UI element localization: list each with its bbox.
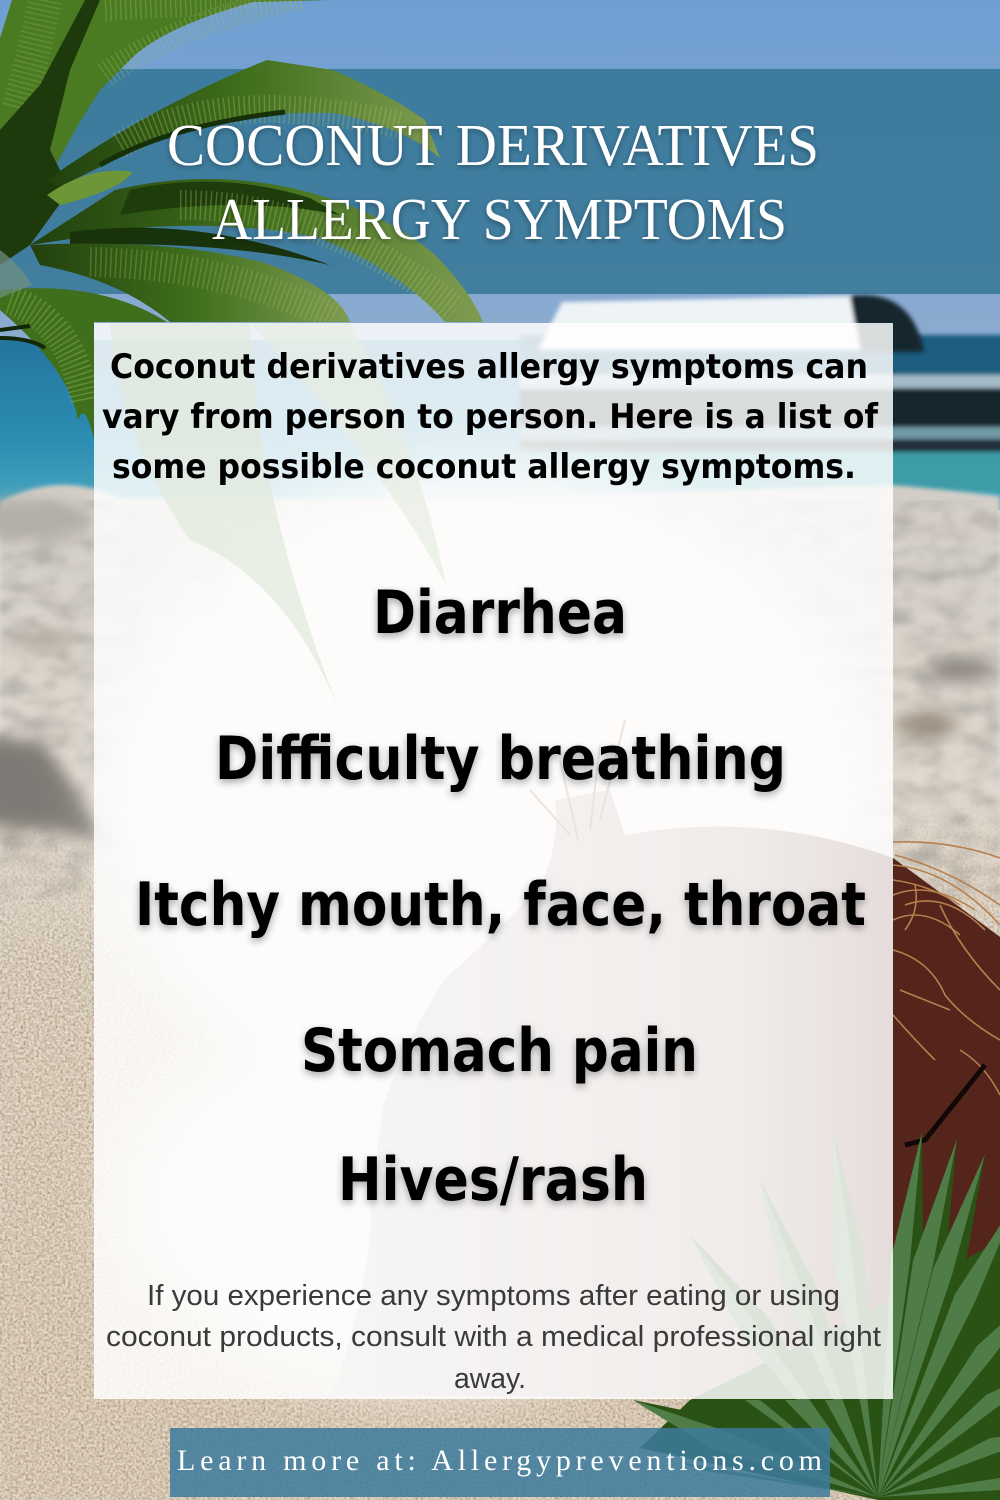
sky xyxy=(0,0,1000,345)
advice text: coconut products, consult with a medical professional right xyxy=(106,1321,881,1353)
symptoms list: Stomach pain xyxy=(301,1016,698,1086)
symptoms list: Difficulty breathing xyxy=(215,724,786,794)
low left frond xyxy=(0,288,167,440)
title line 2: ALLERGY SYMPTOMS xyxy=(212,186,787,252)
sand mounds xyxy=(0,470,994,1390)
pale palm fronds behind the panel xyxy=(110,323,446,725)
title line 1: COCONUT DERIVATIVES xyxy=(167,112,819,178)
intro text: vary from person to person. Here is a list of xyxy=(102,397,879,437)
advice text: away. xyxy=(454,1363,526,1395)
pale leaflets xyxy=(0,250,32,298)
palm tree fronds xyxy=(0,0,483,440)
upper right frond xyxy=(47,60,440,187)
fan palm leaf xyxy=(633,1130,1000,1500)
sea bands and boat at the right xyxy=(520,335,1000,492)
title xyxy=(167,112,819,252)
sea xyxy=(0,340,1000,510)
symptoms list: Hives/rash xyxy=(338,1145,648,1215)
beach building xyxy=(538,295,924,352)
symptoms list: Diarrhea xyxy=(373,578,627,648)
upper frond mass xyxy=(0,0,330,250)
footer link banner xyxy=(170,1428,830,1497)
intro text: some possible coconut allergy symptoms. xyxy=(112,447,856,487)
coconut right side shading xyxy=(893,858,1000,1300)
intro text xyxy=(102,347,879,487)
symptoms list: Itchy mouth, face, throat xyxy=(135,870,866,940)
coconut xyxy=(332,720,1000,1400)
sand mottling xyxy=(0,500,1000,900)
sand xyxy=(0,485,1000,1500)
title band xyxy=(0,69,1000,294)
symptoms list xyxy=(135,578,866,1215)
advice text xyxy=(106,1280,881,1395)
panel: symptoms xyxy=(94,323,893,1399)
banner text: Learn more at: Allergypreventions.com xyxy=(177,1444,822,1477)
dark crown xyxy=(0,0,100,265)
intro text: Coconut derivatives allergy symptoms can xyxy=(110,347,868,387)
small frond xyxy=(47,171,133,205)
advice text: If you experience any symptoms after eating or using xyxy=(147,1280,840,1312)
lower central frond xyxy=(30,243,350,322)
banner background xyxy=(170,1428,830,1497)
lower dark frond xyxy=(70,228,330,265)
long central frond xyxy=(30,179,483,322)
sand texture xyxy=(0,780,1000,1500)
panel background xyxy=(94,323,893,1399)
coconut fibres xyxy=(893,842,1000,1095)
